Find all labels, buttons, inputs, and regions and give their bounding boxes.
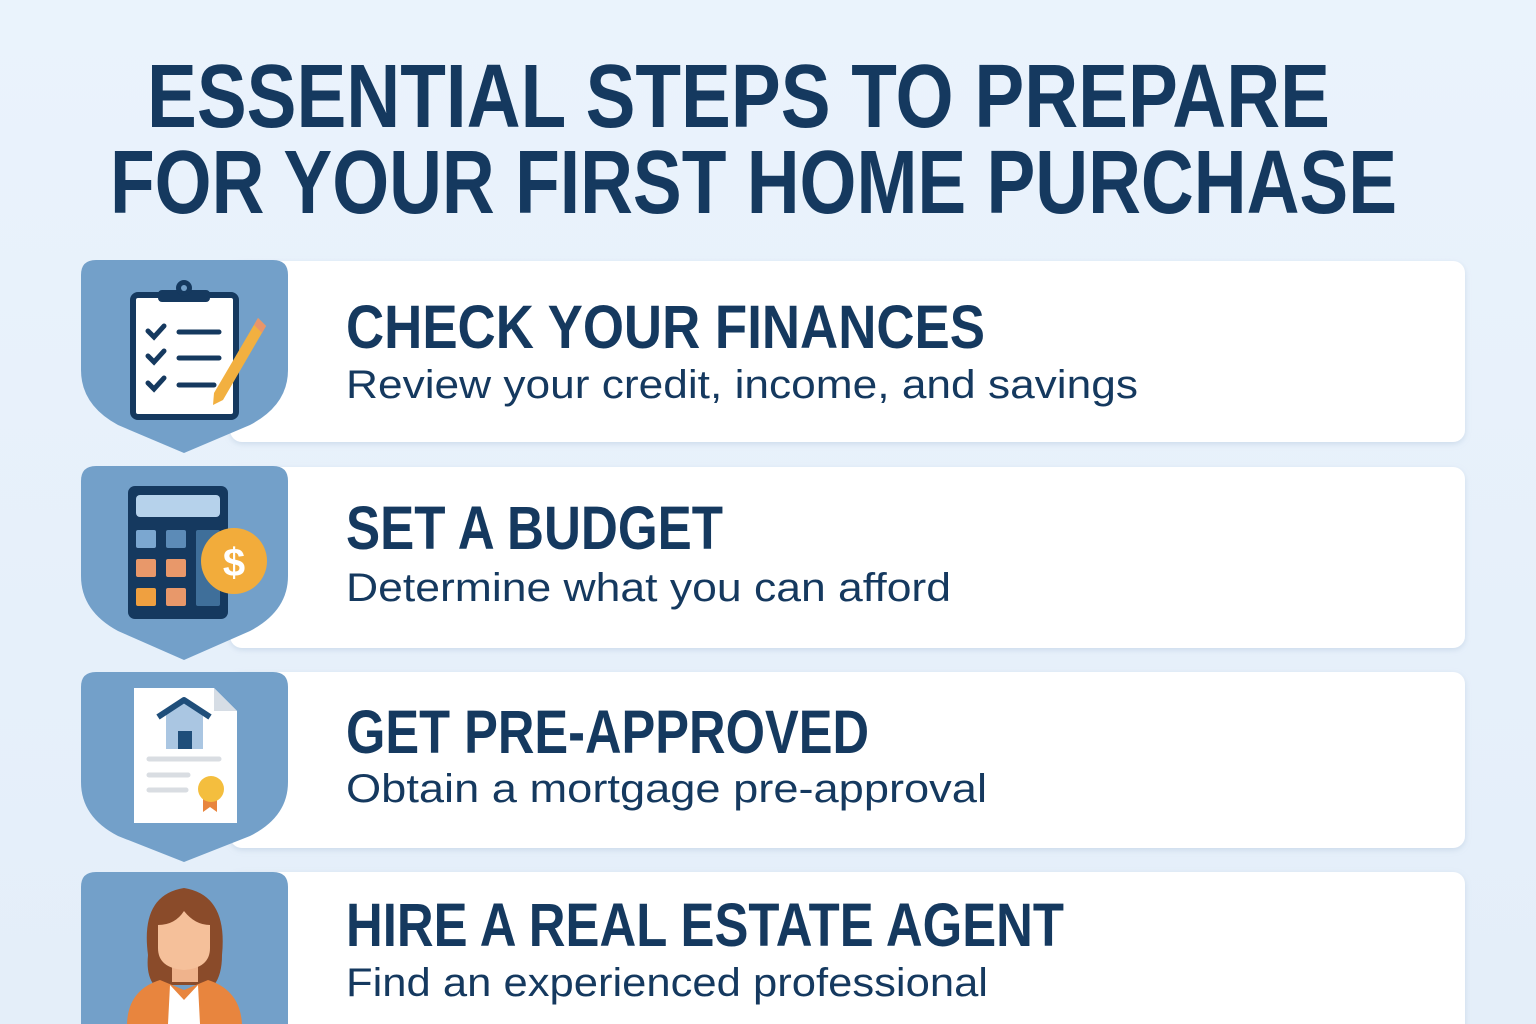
card: hire agent	[230, 872, 1465, 1024]
icon: document shield	[81, 672, 288, 862]
text: find: Find an experienced professional	[346, 961, 988, 1005]
text: determine: Determine what you can afford	[346, 566, 951, 610]
heading: get pre-approved: GET PRE-APPROVED	[346, 698, 869, 766]
heading: hire agent: HIRE A REAL ESTATE AGENT	[346, 891, 1064, 959]
heading: set a budget: SET A BUDGET	[346, 494, 723, 562]
card: set a budget	[230, 467, 1465, 648]
title: ESSENTIAL STEPS TO PREPARE	[147, 47, 1330, 147]
icon: agent shield	[81, 872, 288, 1024]
heading: check your finances: CHECK YOUR FINANCES	[346, 293, 985, 361]
icon: calculator shield: $	[223, 541, 245, 585]
card: check your finances	[230, 261, 1465, 442]
icon: calculator shield	[81, 466, 288, 660]
text: obtain: Obtain a mortgage pre-approval	[346, 767, 987, 811]
card: get pre-approved	[230, 672, 1465, 848]
title	[110, 47, 1397, 233]
text: review: Review your credit, income, and savings	[346, 363, 1138, 407]
icon: clipboard shield	[81, 260, 288, 453]
